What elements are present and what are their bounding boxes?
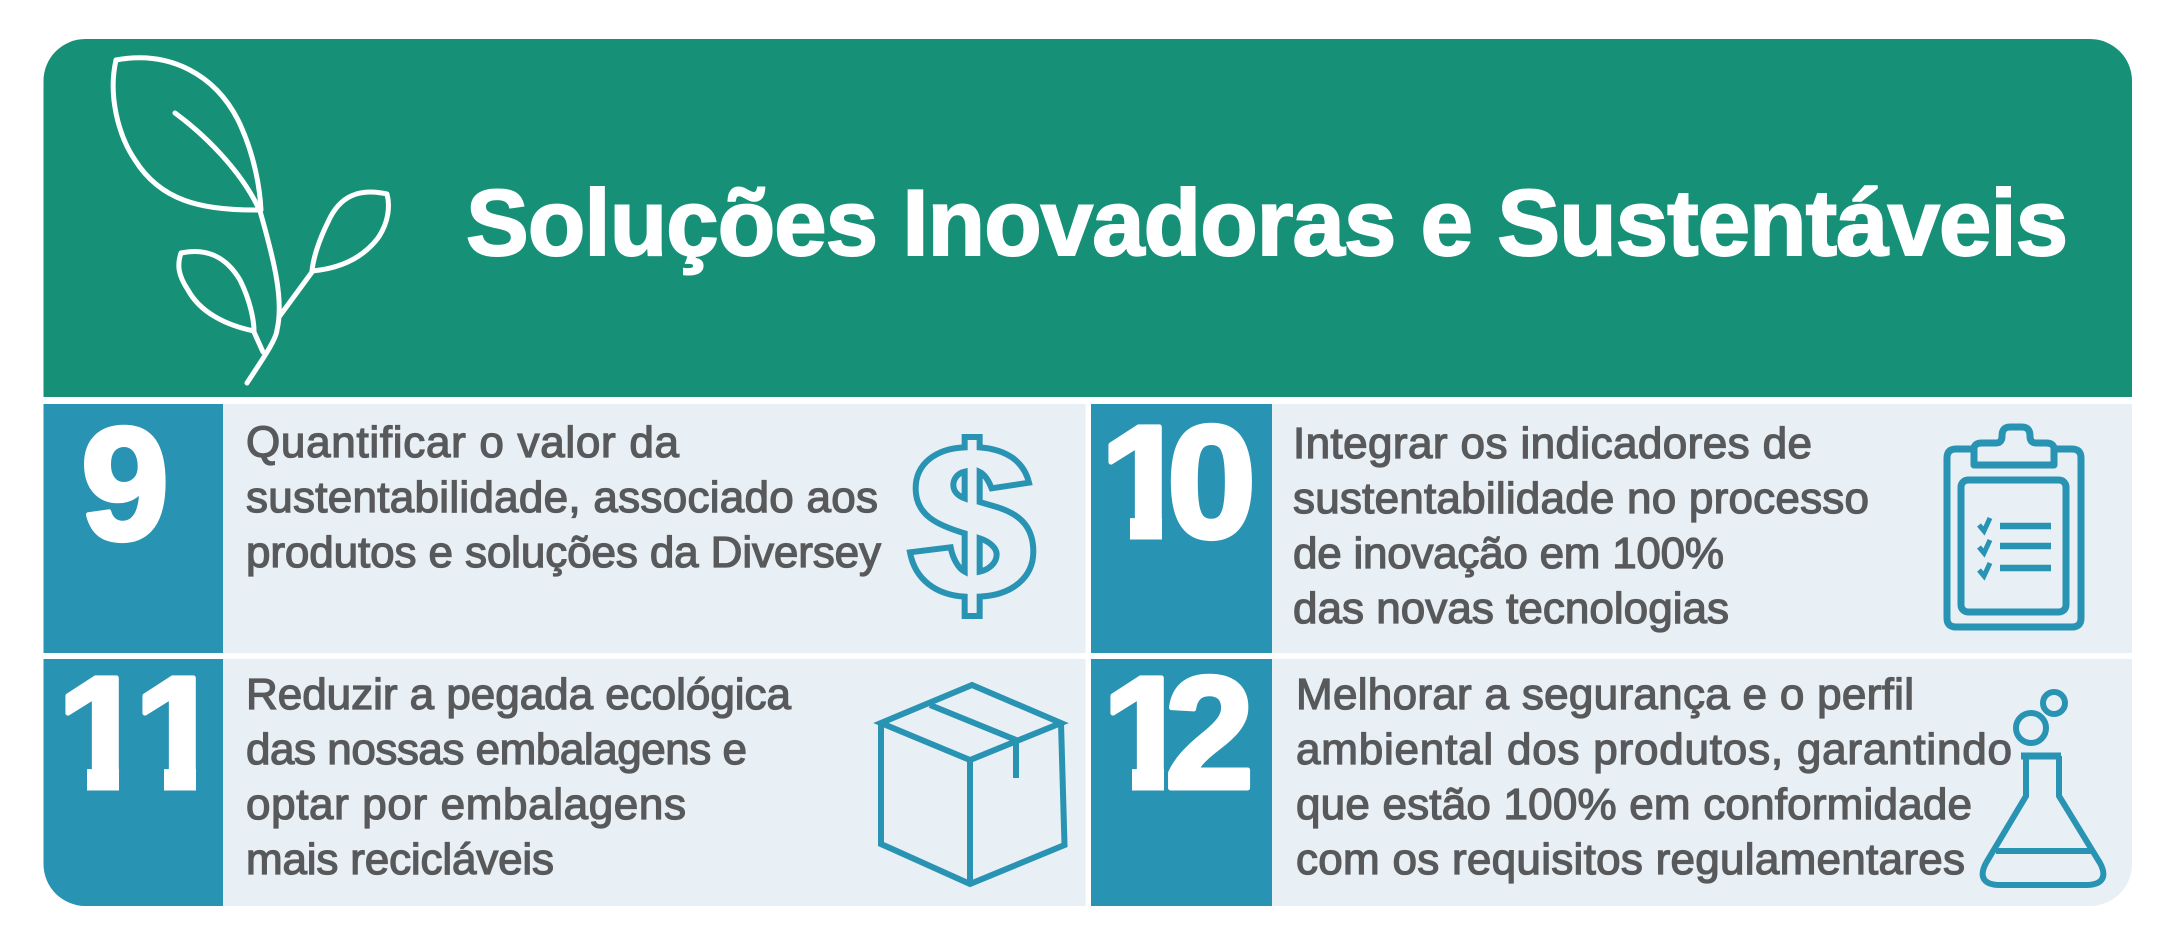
text: item 11: [246, 670, 792, 884]
number 11: 1: [57, 643, 146, 822]
number 11: 1: [134, 643, 223, 822]
text: item 10: [1293, 419, 1869, 633]
text: item 10: sustentabilidade no processo: [1293, 474, 1869, 523]
text: item 11: mais recicláveis: [246, 835, 554, 884]
icon: dollar sign: [910, 437, 1033, 616]
text: item 9: produtos e soluções da Diversey: [246, 528, 881, 577]
text: item 9: [246, 418, 881, 577]
number 10: [1108, 422, 1252, 542]
icon: cardboard box: [881, 685, 1064, 884]
number 10: 0: [1167, 392, 1256, 571]
panel: item 10: [1091, 392, 2133, 653]
number 9: 9: [81, 394, 169, 573]
number 12: 2: [1165, 643, 1254, 822]
text: item 12: [1296, 670, 2012, 884]
icon: flask with bubbles: [1983, 692, 2103, 885]
text: item 9: Quantificar o valor da: [246, 418, 680, 467]
panel: green header: [43, 39, 2133, 397]
number 12: [1110, 674, 1250, 790]
text: item 9: sustentabilidade, associado aos: [246, 473, 878, 522]
panel: item 11: [43, 643, 1086, 907]
text: item 11: Reduzir a pegada ecológica: [246, 670, 792, 719]
text: item 10: de inovação em 100%: [1293, 529, 1724, 578]
number 10: 1: [1100, 392, 1189, 571]
text: item 10: Integrar os indicadores de: [1293, 419, 1812, 468]
text: item 11: optar por embalagens: [246, 780, 686, 829]
text: item 12: com os requisitos regulamentares: [1296, 835, 1965, 884]
title: Soluções Inovadoras e Sustentáveis: [466, 170, 2068, 275]
text: item 12: Melhorar a segurança e o perfil: [1296, 670, 1914, 719]
panel: item 9: [43, 394, 1086, 653]
text: item 12: que estão 100% em conformidade: [1296, 780, 1972, 829]
icon: leafy branch: [113, 58, 388, 383]
number 11: [65, 675, 196, 790]
panel: item 12: [1091, 643, 2133, 907]
text: item 11: das nossas embalagens e: [246, 725, 747, 774]
number 12: 1: [1102, 643, 1191, 822]
text: item 12: ambiental dos produtos, garantindo: [1296, 725, 2012, 774]
icon: clipboard checklist: [1947, 427, 2081, 627]
text: item 10: das novas tecnologias: [1293, 584, 1729, 633]
